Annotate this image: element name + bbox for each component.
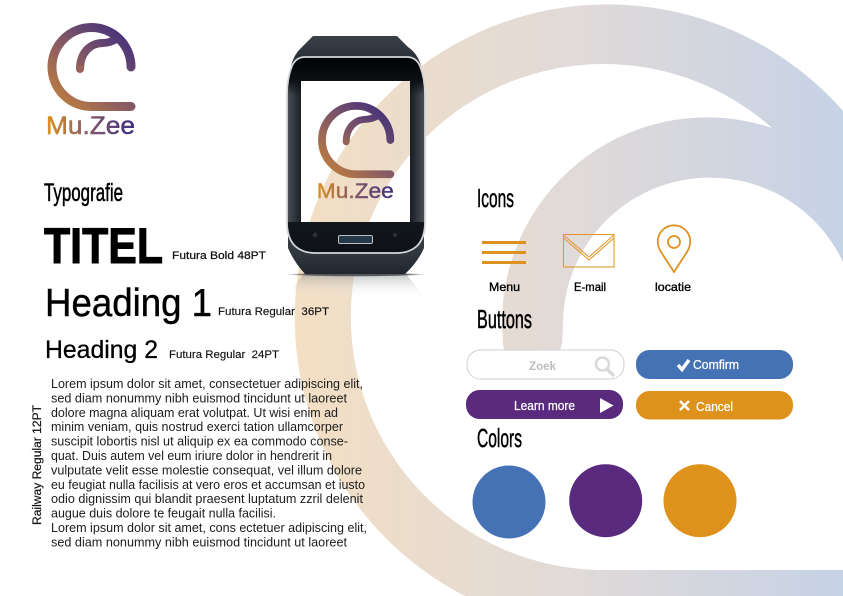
button: search: Zoek — [529, 359, 556, 373]
label: Menu: Menu — [489, 280, 520, 294]
body text sample: quat. Duis autem vel eum iriure dolor in hendrerit in — [51, 449, 332, 463]
logo: Mu.Zee — [46, 28, 135, 140]
body text sample: eu feugiat nulla facilisis at vero eros et accumsan et iusto — [51, 478, 365, 492]
smartwatch — [286, 36, 426, 298]
sample: TITEL: TITEL — [44, 218, 163, 274]
body text sample — [51, 377, 367, 549]
watch home button — [338, 236, 372, 244]
body text sample: dolore magna aliquam erat volutpat. Ut wisi enim ad — [51, 406, 338, 420]
rotated label: Railway Regular 12PT: Railway Regular 12PT — [32, 405, 44, 525]
watch bezel shading — [287, 57, 425, 253]
watch strap bottom — [288, 235, 424, 274]
button: cancel — [636, 391, 793, 420]
label: E-mail: E-mail — [574, 280, 606, 294]
colour swatch: purple — [569, 464, 642, 537]
watch reflection — [287, 275, 425, 298]
icon: e-mail envelope — [564, 234, 614, 267]
button: search — [467, 350, 624, 379]
label: locatie: locatie — [655, 280, 691, 294]
body text sample: sed diam nonummy nibh euismod tincidunt ut laoreet — [51, 391, 348, 405]
body text sample: suscipit lobortis nisl ut aliquip ex ea commodo conse- — [51, 435, 348, 449]
watch sensor dots — [312, 232, 397, 238]
logo on watch screen: Mu.Zee — [317, 178, 394, 203]
body text sample: sed diam nonummy nibh euismod tincidunt ut laoreet — [51, 535, 348, 549]
logo: Mu.Zee: Mu.Zee — [46, 112, 135, 140]
body text sample: augue duis dolore te feugait nulla facilisi. — [51, 507, 276, 521]
logo on watch screen — [317, 106, 394, 203]
heading: Typografie: Typografie — [44, 179, 123, 207]
colour swatch: blue — [472, 466, 546, 538]
button: confirm — [636, 350, 793, 379]
button: learn more — [466, 390, 623, 419]
watch bezel with open screen — [287, 57, 425, 253]
watch silver rim — [287, 57, 425, 253]
sample: Heading 1: Heading 1 — [45, 282, 212, 325]
button: confirm: Comfirm — [693, 358, 739, 372]
button: cancel: Cancel — [696, 400, 733, 414]
button: learn more: Learn more — [514, 399, 575, 413]
icon: menu — [482, 241, 526, 264]
background swirl band — [295, 4, 843, 596]
note: Futura Bold 48PT: Futura Bold 48PT — [172, 250, 266, 262]
body text sample: minim veniam, quis nostrud exerci tation ullamcorper — [51, 420, 343, 434]
heading: Buttons: Buttons — [477, 304, 532, 334]
note: Futura Regular 24PT: Futura Regular 24PT — [169, 349, 279, 361]
body text sample: odio dignissim qui blandit praesent luptatum zzril delenit — [51, 492, 363, 506]
watch strap top — [291, 36, 421, 66]
icon: location pin — [658, 225, 690, 272]
colour swatch: orange — [664, 464, 736, 537]
heading: Icons: Icons — [477, 183, 514, 213]
body text sample: vulputate velit esse molestie consequat, vel illum dolore — [51, 463, 362, 477]
body text sample: Lorem ipsum dolor sit amet, cons ectetuer adipiscing elit, — [51, 521, 367, 535]
sample: Heading 2: Heading 2 — [45, 336, 158, 364]
heading: Colors: Colors — [477, 423, 522, 453]
note: Futura Regular 36PT: Futura Regular 36PT — [218, 306, 329, 318]
watch shadow — [286, 272, 426, 276]
body text sample: Lorem ipsum dolor sit amet, consectetuer adipiscing elit, — [51, 377, 363, 391]
